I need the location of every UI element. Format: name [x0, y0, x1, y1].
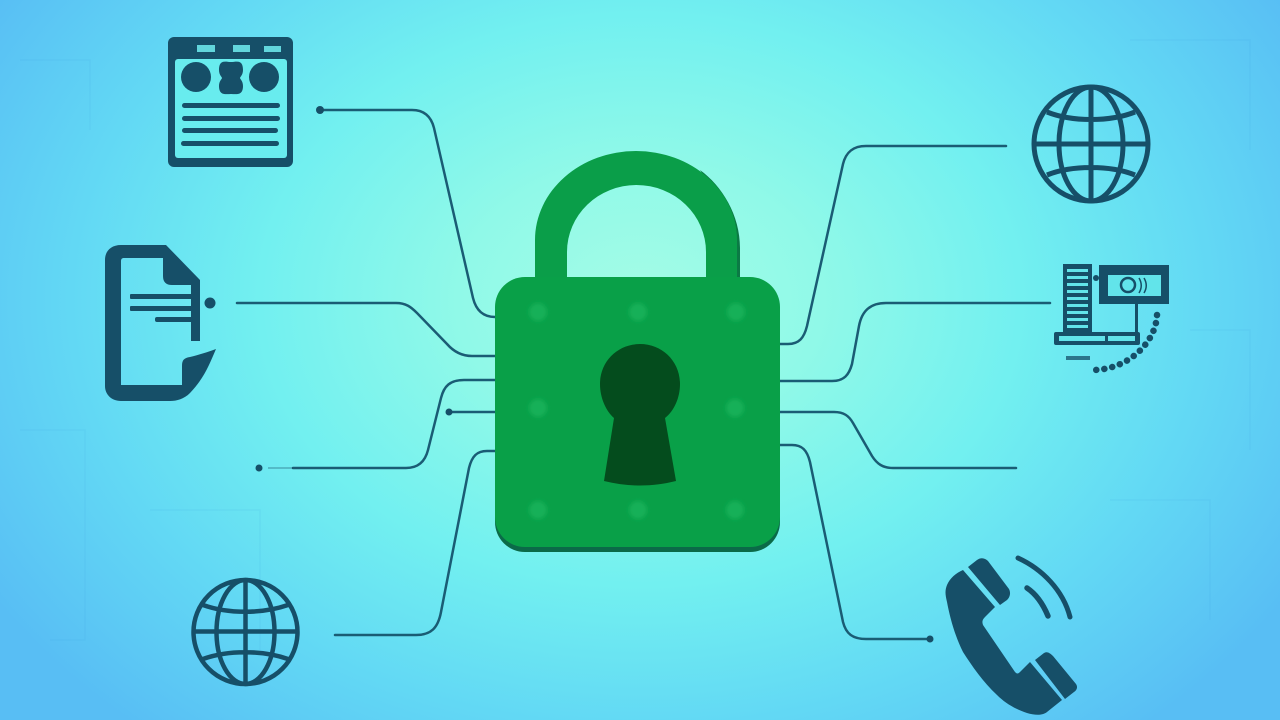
icon: server and monitor: [1054, 264, 1169, 370]
connector: short left stub: [449, 411, 495, 413]
padlock body shadow: [495, 281, 780, 552]
connector: left to document: [237, 303, 495, 356]
icon: browser window: [168, 37, 293, 167]
keyhole: [600, 344, 680, 486]
padlock rivets: [529, 303, 745, 519]
padlock body: [495, 277, 780, 547]
icon: telephone: [946, 558, 1077, 715]
connector: left to node: [293, 380, 495, 468]
connector lines: [237, 110, 1050, 639]
connector: right to server: [780, 303, 1050, 381]
icon: globe upper right: [1034, 87, 1148, 201]
padlock: [495, 151, 780, 552]
connector end dots: [256, 106, 934, 642]
connector: lower left to globe: [335, 451, 495, 635]
icon: globe lower left: [194, 580, 298, 684]
padlock shackle: [535, 151, 737, 280]
connector: lower right to phone: [780, 445, 930, 639]
connector: upper left to browser: [320, 110, 495, 317]
icon: document: [105, 245, 216, 401]
connector: upper right to globe: [780, 146, 1006, 344]
connector: right to node: [780, 412, 1016, 468]
padlock shackle shadow: [700, 170, 740, 280]
